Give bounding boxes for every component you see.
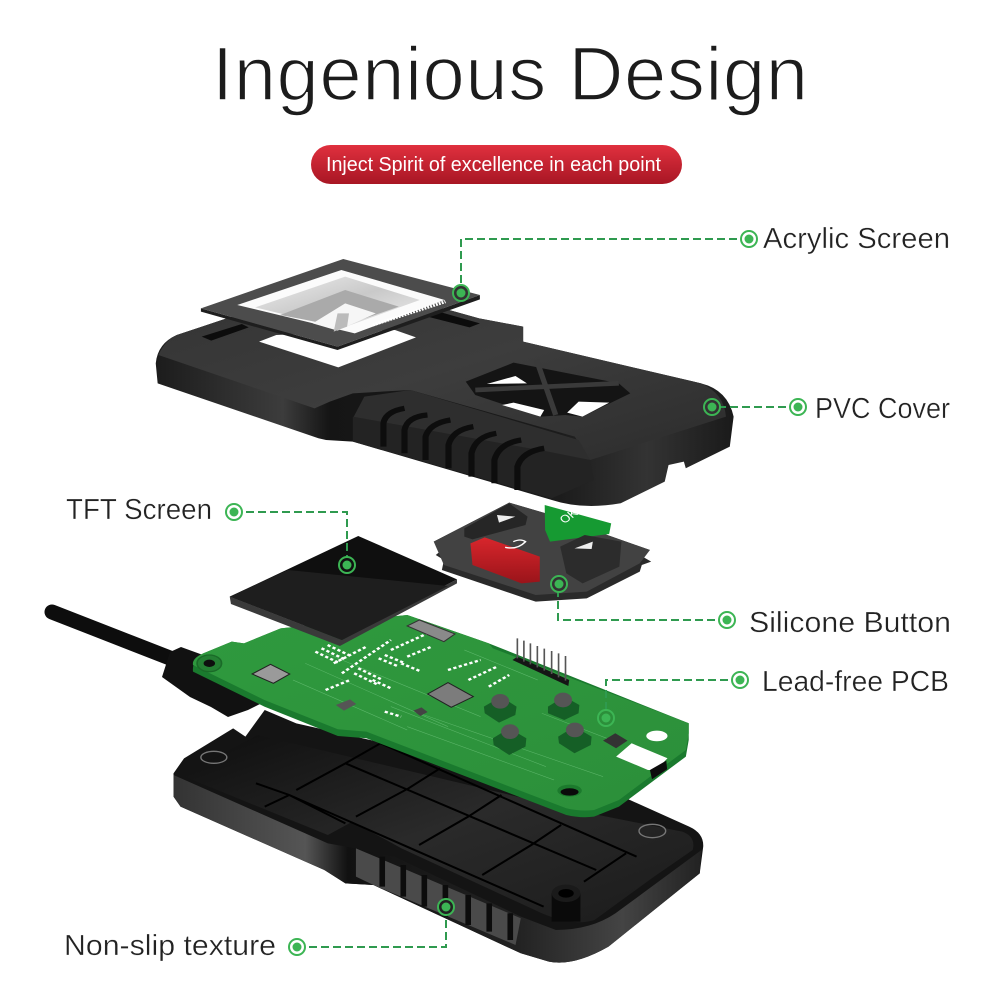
callout: TFT Screen: TFT Screen — [66, 494, 212, 526]
PVC cover — [156, 280, 734, 506]
pin header — [512, 657, 569, 686]
button: red back — [470, 537, 540, 583]
tact switches — [484, 697, 517, 723]
silicone button pad — [434, 503, 651, 602]
acrylic screen — [201, 259, 480, 350]
callout: PVC Cover: PVC Cover — [815, 393, 950, 425]
callout: Silicone Button — [551, 576, 951, 639]
title: Ingenious Design — [212, 32, 808, 117]
callout: Lead-free PCB: Lead-free PCB — [762, 666, 949, 698]
PCB — [193, 615, 689, 817]
button: black left — [464, 503, 528, 539]
callout: Acrylic Screen: Acrylic Screen — [763, 223, 950, 255]
callout: Non-slip texture: Non-slip texture — [64, 930, 276, 962]
usb port — [616, 743, 668, 770]
callout: Lead-free PCB — [598, 666, 949, 726]
grip ribs — [383, 408, 544, 490]
cable — [52, 612, 262, 717]
silicone button pad: OK — [557, 507, 581, 526]
callout: TFT Screen — [66, 494, 355, 573]
button: green OK — [545, 505, 611, 542]
subtitle pill — [311, 145, 682, 184]
subtitle pill: Inject Spirit of excellence in each point — [326, 154, 661, 176]
PCB solder pads — [315, 633, 509, 717]
button: black right — [560, 535, 621, 583]
callout: Acrylic Screen — [453, 223, 950, 301]
chips — [252, 664, 290, 683]
callout: Non-slip texture — [64, 899, 454, 962]
TFT screen — [230, 536, 457, 646]
bottom case — [174, 710, 703, 963]
callout: PVC Cover — [704, 393, 950, 425]
cover window — [259, 330, 416, 367]
vent X — [466, 363, 630, 417]
PCB traces — [293, 650, 611, 780]
callout: Silicone Button: Silicone Button — [749, 607, 951, 639]
